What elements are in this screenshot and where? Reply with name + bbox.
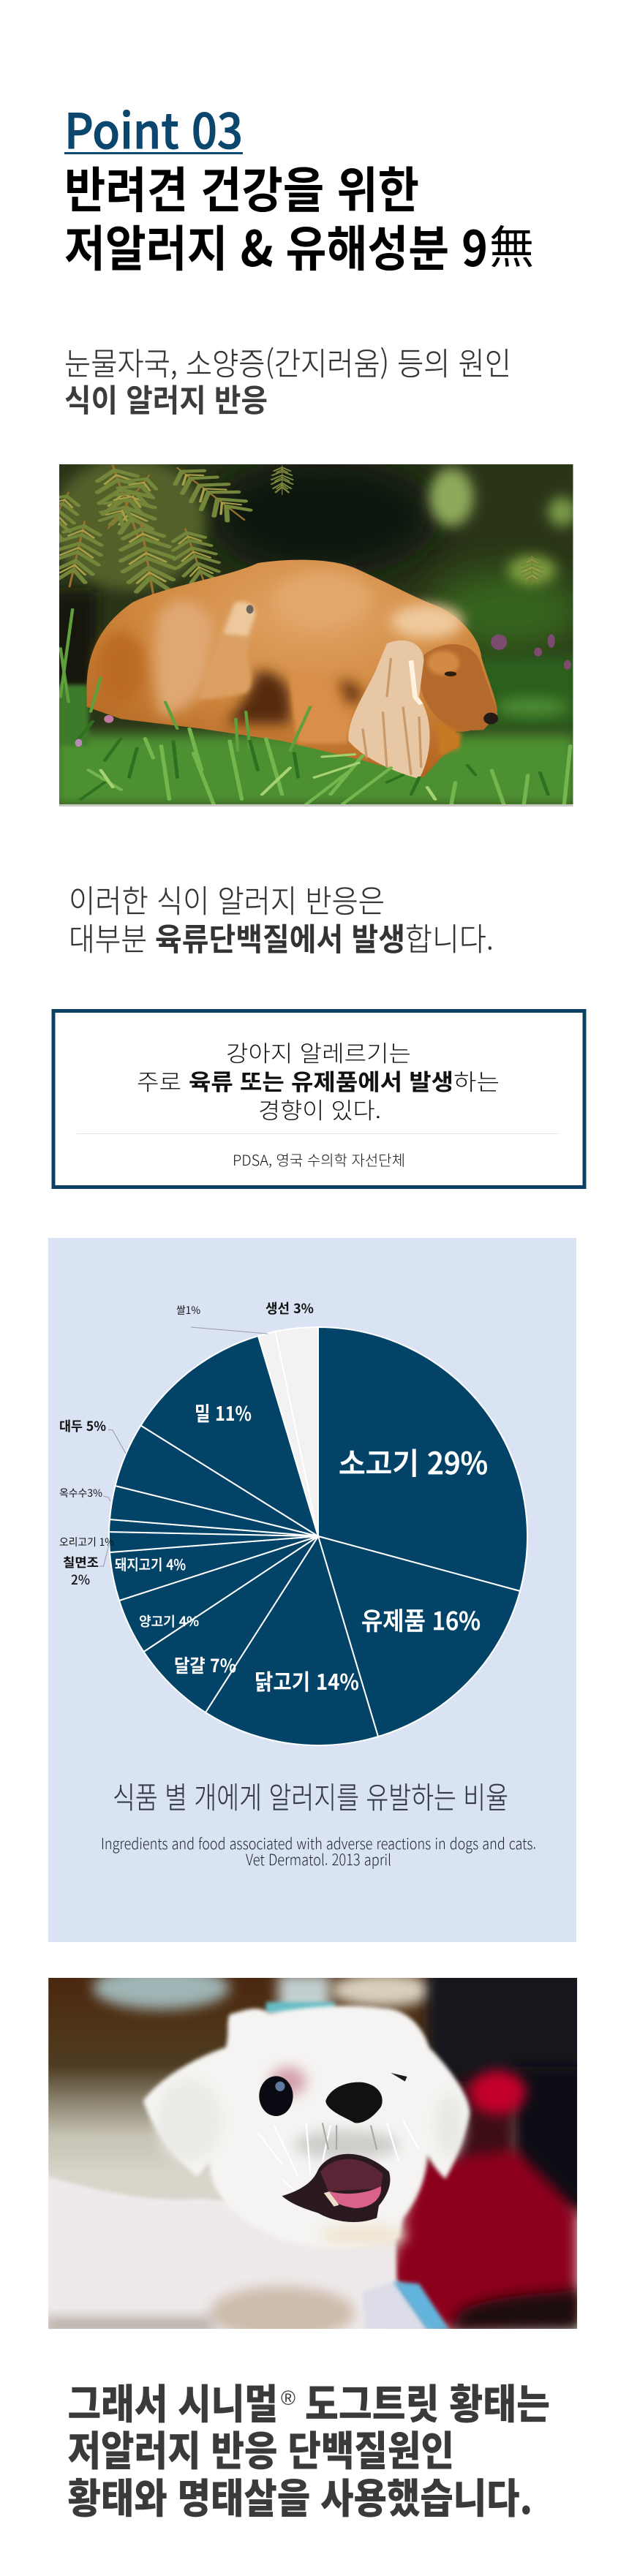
leader lines (99, 1327, 268, 1566)
pie labels: 옥수수3% (59, 1486, 102, 1500)
pie labels: 오리고기 1% (59, 1535, 114, 1549)
dog body (45, 2175, 397, 2333)
closing line 1: 도그트릿 황태는 (305, 2372, 550, 2431)
statement line 2: 합니다. (405, 915, 494, 960)
intro line 2: 식이 알러지 반응 (64, 376, 268, 421)
photo: happy white maltese dog (48, 1978, 578, 2329)
closing line 3: 황태와 명태살을 사용했습니다. (67, 2466, 532, 2526)
pie labels: 쌀1% (176, 1303, 200, 1318)
heading: Point 03: Point 03 (64, 93, 243, 163)
statement line 1: 이러한 식이 알러지 반응은 (69, 877, 385, 922)
dog head (143, 2006, 470, 2248)
panel: allergy pie chart (48, 1238, 576, 1942)
quote line 1: 강아지 알레르기는 (226, 1035, 411, 1068)
heading block (64, 93, 534, 281)
statement line 2: 대부분 (69, 915, 147, 960)
eyes (259, 2067, 407, 2116)
panel background (48, 1238, 576, 1942)
pine branches (19, 459, 543, 598)
pie labels: 양고기 4% (139, 1612, 199, 1631)
closing line 1 (67, 2372, 550, 2431)
chart caption: 식품 별 개에게 알러지를 유발하는 비율 (113, 1773, 508, 1817)
pie chart (109, 1327, 527, 1745)
pie labels: 돼지고기 4% (115, 1553, 186, 1574)
closing message (67, 2372, 550, 2526)
statement line 2: 육류단백질에서 발생 (155, 915, 405, 960)
pie labels: 유제품 16% (361, 1601, 481, 1637)
intro text (64, 339, 511, 421)
heading line 1: 반려견 건강을 위한 (64, 151, 419, 222)
pie labels: 소고기 29% (339, 1439, 488, 1483)
quote box (53, 1011, 584, 1187)
intro line 1: 눈물자국, 소양증(간지러움) 등의 원인 (64, 339, 511, 385)
pie labels: 밀 11% (195, 1398, 252, 1427)
pie labels: 칠면조 (63, 1552, 99, 1571)
quote frame (53, 1011, 584, 1187)
grass ground (53, 733, 576, 807)
statement text (69, 877, 494, 960)
closing line 1: ® (281, 2387, 295, 2409)
grass blades (61, 609, 570, 804)
chart citation (101, 1832, 536, 1870)
open mouth (282, 2154, 390, 2222)
quote line 3: 경향이 있다. (258, 1092, 381, 1125)
heading line 2: 저알러지 & 유해성분 9 (64, 210, 488, 281)
chart citation: Vet Dermatol. 2013 april (246, 1848, 391, 1870)
quote source: PDSA, 영국 수의학 자선단체 (233, 1149, 405, 1170)
closing line 2: 저알러지 반응 단백질원인 (67, 2419, 454, 2478)
chart citation: Ingredients and food associated with adverse reactions in dogs and cats. (101, 1832, 536, 1854)
purple flowers (75, 634, 571, 747)
quote line 2 (137, 1064, 500, 1097)
pie labels: 닭고기 14% (255, 1664, 359, 1696)
photo: golden cocker spaniel scratching in the grass (59, 464, 573, 807)
closing line 1: 그래서 시니멀 (67, 2372, 278, 2431)
pie labels (59, 1299, 488, 1696)
nose (325, 2082, 383, 2123)
dog body (86, 560, 497, 777)
pie labels: 2% (71, 1570, 90, 1589)
quote line 2: 주로 (137, 1064, 181, 1097)
dog ear (348, 641, 430, 779)
heading underline (64, 152, 243, 154)
quote line 2: 하는 (453, 1064, 500, 1097)
quote line 2: 육류 또는 유제품에서 발생 (189, 1064, 453, 1097)
dog head (419, 644, 498, 755)
heading glyph: 無: 無 (489, 211, 534, 276)
pie labels: 달걀 7% (174, 1652, 236, 1678)
pie labels: 생선 3% (265, 1299, 314, 1318)
statement line 2 (69, 915, 494, 960)
pie labels: 대두 5% (59, 1416, 106, 1435)
